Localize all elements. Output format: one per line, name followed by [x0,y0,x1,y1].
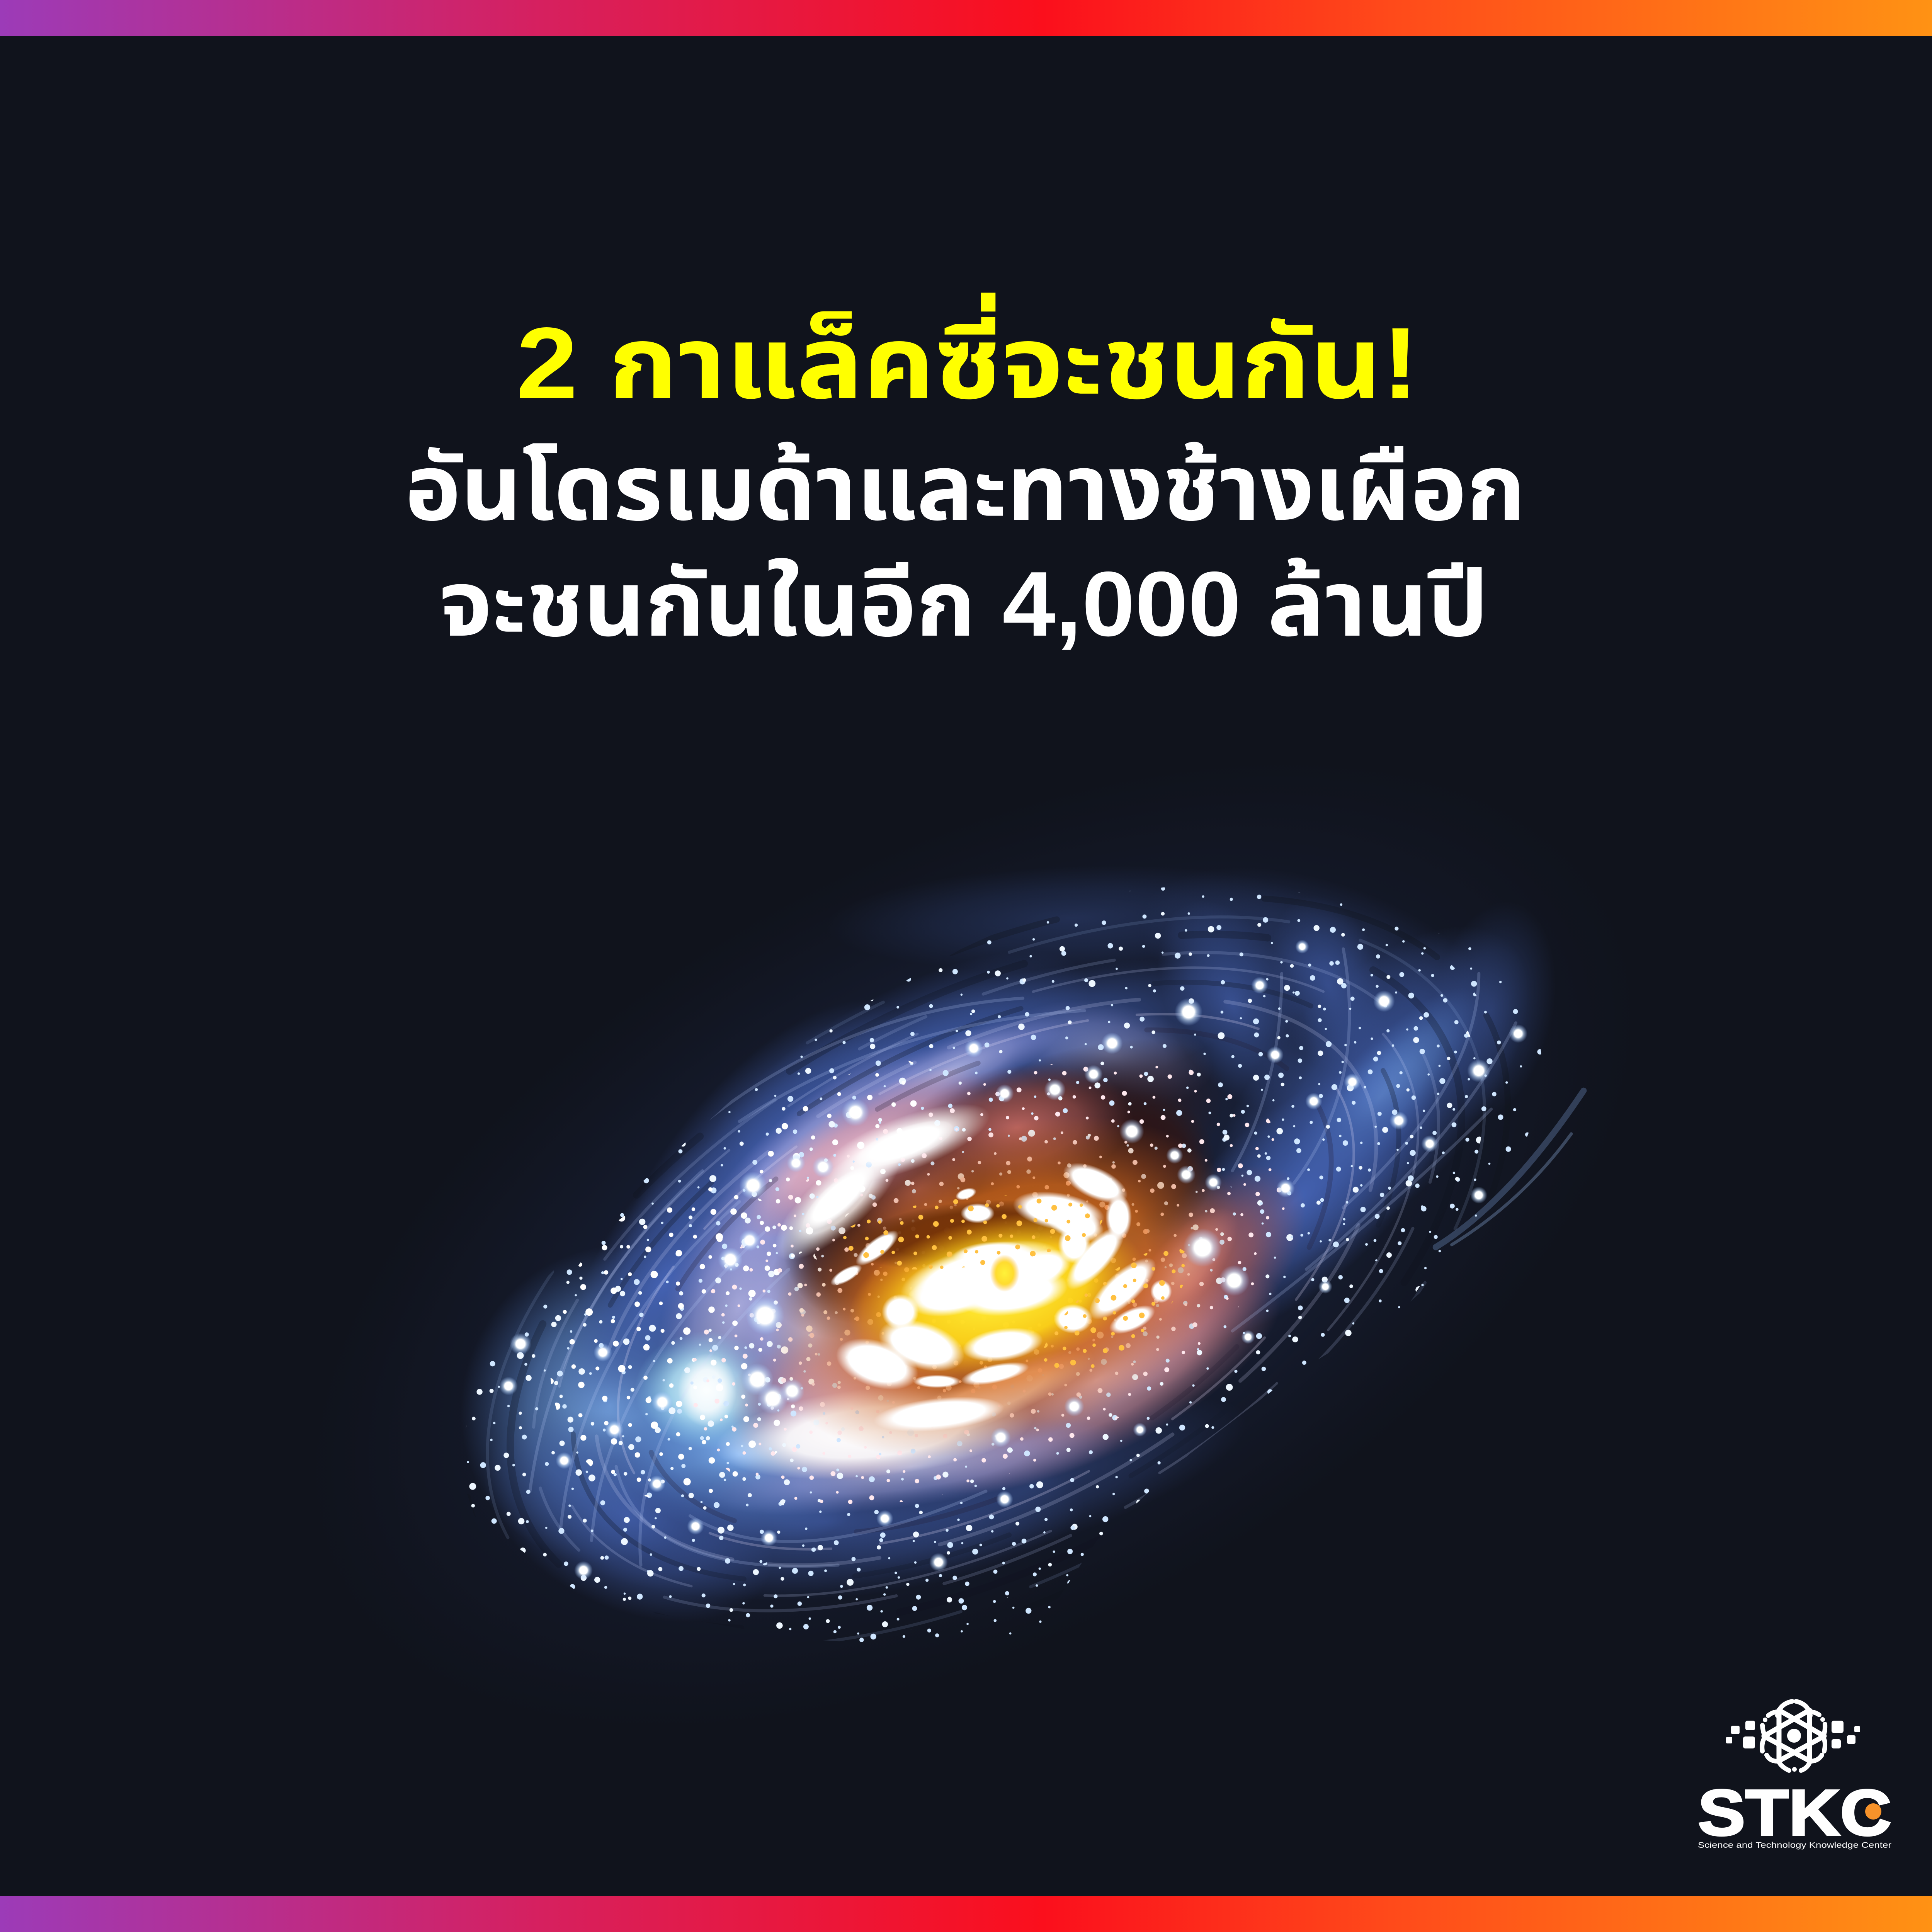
logo emblem: atom with data squares [1726,1701,1860,1772]
arm streak curves [530,949,1516,1566]
emblem data squares [1726,1721,1860,1748]
core white centre [894,1226,1077,1325]
core warm star dots [829,1184,1208,1398]
emblem nucleus and dots [1763,1717,1825,1772]
emblem hexagram [1764,1710,1824,1761]
STKC logo [1698,1701,1891,1850]
bottom blue band [562,1360,1264,1616]
pink inner ring [716,1036,1257,1481]
galaxy soft arms [146,555,1801,1932]
lower left blue lobe [416,1106,893,1665]
dark inner gap [726,978,1270,1400]
subheading line 2: จะชนกันในอีก 4,000 ล้านปี [439,553,1488,655]
upper lavender arc [559,899,1266,1391]
galaxy small star fields [309,721,1638,1842]
logo orange dot [1865,1803,1881,1820]
dim top arm [824,828,1575,1132]
mauve lower inner band [670,1125,1346,1539]
heading: two galaxies will collide: 2 กาแล็คซี่จะชนกัน! [516,292,1419,420]
galaxy outer halo [146,555,1801,1932]
concentric streak arcs [486,896,1509,1641]
core yellow centre [833,1187,1160,1401]
galaxy swirling streak texture [486,896,1517,1641]
bottom gradient bar [0,1896,1932,1932]
core bright clumps [794,1111,1172,1437]
top gradient bar [0,0,1932,36]
galaxy bright white band [678,1088,1104,1493]
logo tagline: Science and Technology Knowledge Center [1698,1841,1891,1850]
right blue arm [1099,871,1586,1389]
galaxy edge arc streak [1436,1091,1583,1247]
title block [405,292,1526,655]
core dark lane [847,1190,1085,1279]
emblem orbit arcs [1762,1701,1825,1770]
subheading line 1: อันโดรเมด้าและทางช้างเผือก [405,437,1526,539]
core yellow spot [990,1255,1019,1292]
galaxy bright stars [499,940,1527,1580]
galaxy orange core [718,1051,1292,1523]
galaxy illustration [440,856,1587,1642]
logo wordmark: STKC [1698,1776,1891,1849]
core glow [718,1051,1292,1523]
